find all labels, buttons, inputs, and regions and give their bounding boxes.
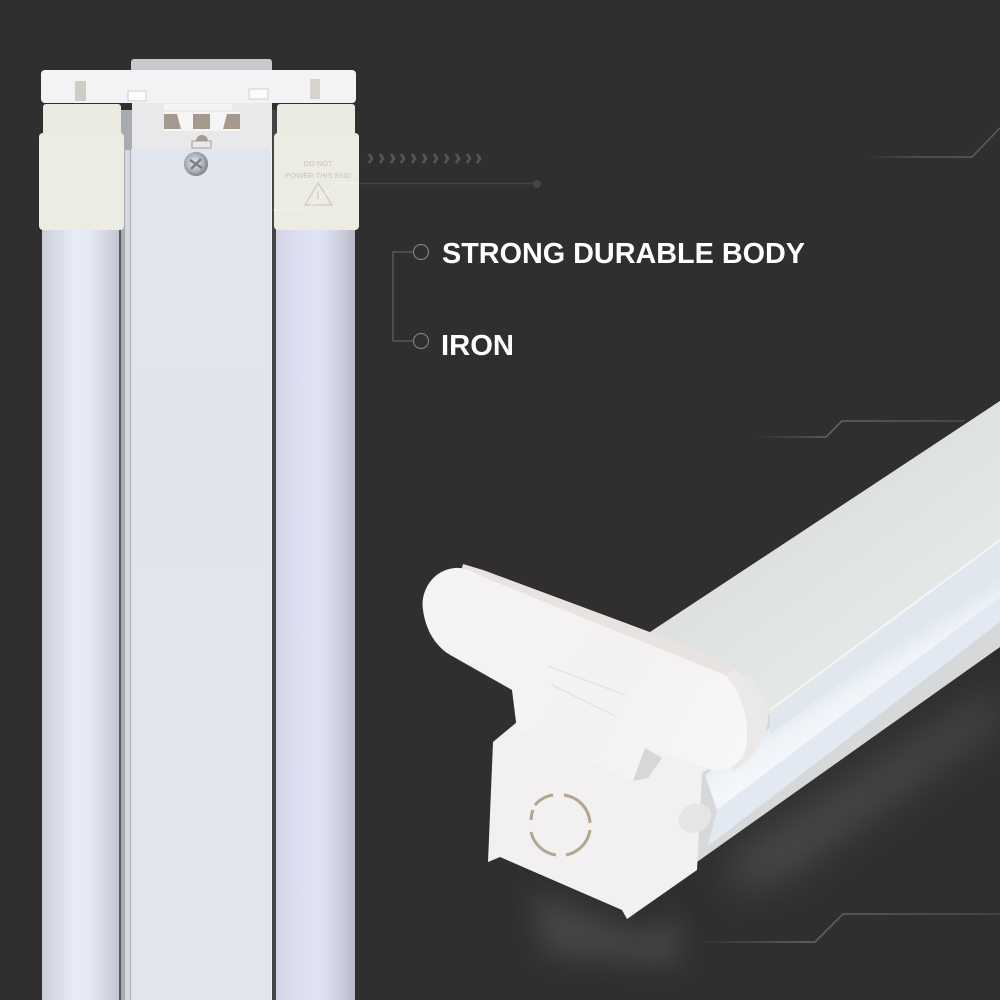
warning triangle	[305, 183, 332, 205]
stem shadow	[633, 748, 662, 781]
screw	[184, 152, 208, 176]
moulded marks on cap	[548, 666, 625, 716]
left tube end cap	[39, 104, 124, 230]
fixture: angled perspective view	[423, 401, 1000, 919]
callout connector	[393, 244, 428, 348]
lower diffuser band	[708, 597, 1000, 846]
reflector band	[770, 540, 1000, 735]
floor glow under fixture	[530, 690, 1000, 965]
top bracket	[41, 70, 356, 103]
right tube	[276, 229, 355, 1000]
decorative chevron row and dotted line	[356, 154, 541, 188]
centre metal plate	[131, 149, 271, 1000]
side bump	[673, 797, 717, 839]
tube band	[705, 563, 1000, 810]
knockout circle	[531, 795, 590, 855]
end cap right sleeve	[722, 668, 768, 772]
right tube end cap	[274, 104, 359, 230]
junction box	[488, 722, 715, 919]
right tube end cap: POWER THIS END	[285, 171, 351, 180]
decorative line: bottom right	[695, 914, 1000, 942]
heading: strong durable body: STRONG DURABLE BODY	[442, 238, 805, 270]
top panel	[650, 401, 1000, 715]
left gap strip	[119, 110, 132, 1000]
end cap oval with stem	[423, 568, 747, 780]
panel highlight	[770, 540, 1000, 710]
centre housing	[132, 100, 272, 150]
warning text on cap: DO NOT	[303, 159, 333, 168]
end cap top ridge	[460, 564, 736, 682]
left tube	[42, 229, 119, 1000]
fixture: vertical front view	[39, 59, 359, 1000]
rear mounting tab	[131, 59, 272, 75]
decorative line: top right	[866, 128, 1000, 157]
right gap strip	[269, 110, 277, 1000]
heading: iron: IRON	[441, 330, 514, 362]
gray bottom edge	[640, 401, 1000, 865]
faint connector overlay across cap	[273, 183, 358, 210]
decorative line: middle right	[757, 421, 965, 437]
